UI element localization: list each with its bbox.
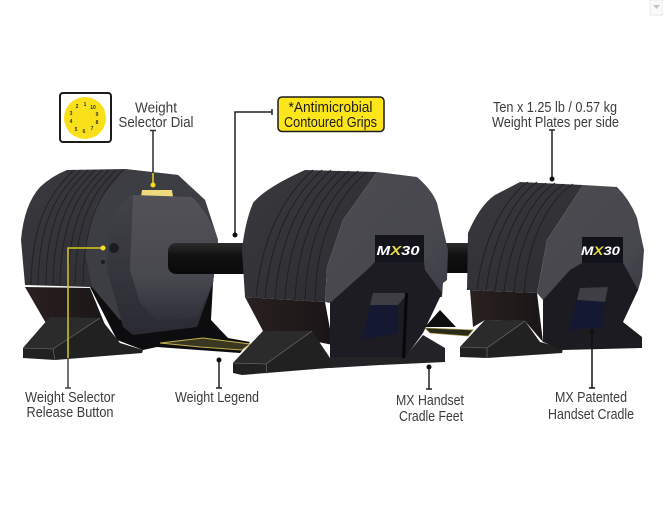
leader: grips (232, 109, 272, 238)
logo box middle (375, 235, 424, 262)
end cap middle (325, 172, 448, 303)
icon: weight selector dial inset: 1 (84, 102, 87, 108)
foot left of middle (233, 331, 353, 375)
label: patented handset cradle: Handset Cradle (548, 407, 634, 423)
icon: weight selector dial inset: 2 (76, 104, 79, 110)
plates right (467, 182, 583, 293)
label: handset cradle feet (396, 393, 464, 425)
logo box right (581, 237, 623, 263)
leader: release button (65, 246, 106, 388)
handle: left bar (168, 243, 250, 274)
icon: weight selector dial inset: 4 (70, 119, 73, 125)
label: weight selector dial (118, 100, 194, 131)
foot right of middle (330, 335, 445, 368)
handset window middle (362, 293, 408, 358)
label: weight selector release button: Release Button (26, 405, 114, 421)
dumbbell: middle (233, 170, 448, 375)
label: patented handset cradle (548, 390, 634, 423)
foot of right (460, 320, 563, 358)
leader: patented cradle (589, 330, 595, 388)
icon: weight selector dial inset: 6 (83, 129, 86, 135)
label: weight plates per side (492, 100, 619, 131)
label: weight plates per side: Weight Plates per side (492, 115, 619, 131)
label: handset cradle feet: Cradle Feet (399, 409, 463, 425)
icon: corner dropdown widget (650, 0, 663, 15)
handset cradle right (543, 263, 642, 350)
dial left (141, 190, 173, 197)
leader: weight plates (549, 130, 555, 182)
handle: right bar (440, 243, 476, 273)
icon: weight selector dial inset: 10 (90, 105, 96, 111)
label: weight plates per side: Ten x 1.25 lb / 0.57 kg (493, 100, 617, 116)
callout: antimicrobial contoured grips (278, 97, 384, 132)
leader: dial (150, 130, 156, 188)
label: weight selector release button (25, 390, 115, 421)
plates left (21, 169, 218, 300)
label: handset cradle feet: MX Handset (396, 393, 464, 409)
dumbbell: right (460, 182, 644, 358)
end cap left (107, 195, 218, 335)
label: weight selector release button: Weight Selector (25, 390, 115, 406)
label: weight selector dial: Selector Dial (118, 115, 194, 131)
label: patented handset cradle: MX Patented (555, 390, 627, 406)
icon: weight selector dial inset (60, 93, 111, 142)
dumbbell: left (21, 169, 250, 360)
handset cradle middle (330, 262, 442, 358)
logo box middle: MX30 (376, 243, 420, 258)
icon: weight selector dial inset: 9 (96, 112, 99, 118)
icon: weight selector dial inset: 3 (70, 111, 73, 117)
icon: weight selector dial inset: 5 (75, 127, 78, 133)
logo box right: MX30 (581, 244, 620, 258)
weight legend plate (160, 310, 473, 350)
label: weight legend: Weight Legend (175, 390, 259, 406)
callout: antimicrobial contoured grips: Contoured Grips (284, 115, 377, 131)
icon: weight selector dial inset: 7 (91, 126, 94, 132)
leader: weight legend (216, 358, 222, 388)
icon: weight selector dial inset: 8 (96, 120, 99, 126)
plates middle (242, 170, 377, 302)
cradle base left (23, 283, 250, 360)
handset window right (568, 287, 608, 330)
label: weight selector dial: Weight (135, 100, 177, 116)
end cap right (537, 185, 644, 300)
leader: handset feet (426, 364, 432, 389)
callout: antimicrobial contoured grips: *Antimicrobial (288, 100, 372, 116)
